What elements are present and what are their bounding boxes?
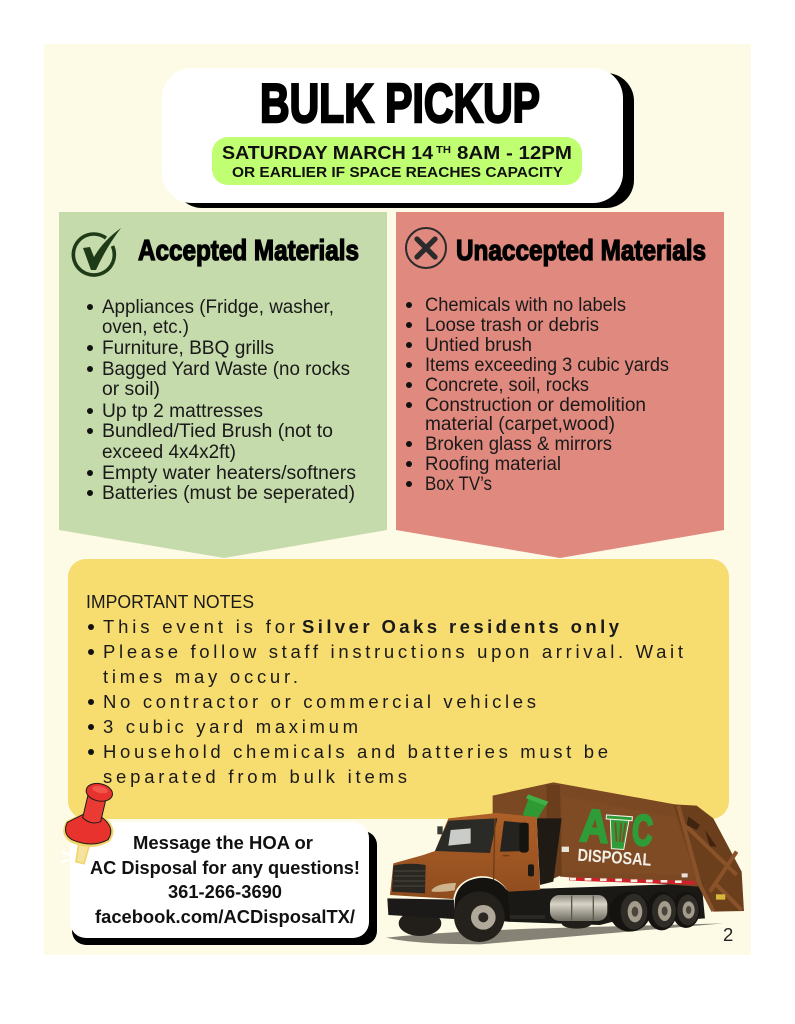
- unaccepted list: Roofing material: [425, 454, 561, 475]
- date pill: [212, 137, 582, 185]
- icon: x mark: [406, 228, 446, 268]
- title: BULK PICKUP: [260, 72, 540, 134]
- unaccepted list: Loose trash or debris: [425, 315, 599, 336]
- contact card: Message the HOA or: [133, 833, 313, 853]
- unaccepted list: Untied brush: [425, 335, 532, 356]
- unaccepted list: Concrete, soil, rocks: [425, 375, 589, 396]
- notes list: This event is for: [103, 616, 295, 637]
- accepted list: Bundled/Tied Brush (not to: [102, 421, 333, 442]
- accepted list: exceed 4x4x2ft): [102, 442, 236, 463]
- contact card: 361-266-3690: [168, 882, 282, 902]
- unaccepted list: Box TV’s: [425, 474, 492, 495]
- panel: important notes: [68, 559, 729, 819]
- accepted list: Up tp 2 mattresses: [102, 401, 263, 422]
- notes list: Household chemicals and batteries must be: [103, 741, 608, 762]
- accepted list: Bagged Yard Waste (no rocks: [102, 359, 350, 380]
- notes list: 3 cubic yard maximum: [103, 716, 358, 737]
- accepted list: or soil): [102, 379, 160, 400]
- heading: unaccepted: Unaccepted Materials: [456, 235, 706, 267]
- notes heading: IMPORTANT NOTES: [86, 591, 254, 612]
- notes list: Silver Oaks residents only: [302, 616, 620, 637]
- unaccepted list: material (carpet,wood): [425, 414, 615, 435]
- date pill: SATURDAY MARCH 14: [222, 142, 434, 163]
- page background: [44, 44, 751, 955]
- wheels: [454, 891, 700, 942]
- accepted list: [87, 297, 356, 504]
- truck logo: DISPOSAL: [577, 845, 652, 870]
- unaccepted list: [406, 295, 669, 495]
- accepted list: Appliances (Fridge, washer,: [102, 297, 334, 318]
- notes list: No contractor or commercial vehicles: [103, 691, 536, 712]
- unaccepted list: Broken glass & mirrors: [425, 434, 612, 455]
- date pill: 8AM - 12PM: [457, 142, 572, 163]
- heading: accepted: Accepted Materials: [138, 235, 359, 267]
- notes list: Please follow staff instructions upon arrival. Wait: [103, 641, 683, 662]
- accepted list: Batteries (must be seperated): [102, 483, 355, 504]
- green bin: [523, 794, 548, 820]
- panel: accepted materials: [59, 212, 387, 558]
- title card: [162, 68, 634, 208]
- unaccepted list: Items exceeding 3 cubic yards: [425, 355, 669, 376]
- panel: unaccepted materials: [396, 212, 724, 558]
- notes list: [88, 616, 683, 787]
- contact card: facebook.com/ACDisposalTX/: [95, 907, 355, 927]
- accepted list: Furniture, BBQ grills: [102, 338, 274, 359]
- notes list: separated from bulk items: [103, 766, 407, 787]
- unaccepted list: Construction or demolition: [425, 395, 646, 416]
- contact card: [70, 822, 377, 945]
- icon: check mark: [73, 228, 121, 275]
- truck logo: A: [579, 799, 611, 853]
- truck logo: [577, 799, 656, 870]
- date pill: TH: [436, 144, 451, 156]
- page number: 2: [723, 924, 733, 945]
- contact card: AC Disposal for any questions!: [90, 858, 360, 878]
- notes list: times may occur.: [103, 666, 298, 687]
- accepted list: Empty water heaters/softners: [102, 463, 356, 484]
- truck logo: C: [630, 806, 654, 856]
- date pill: OR EARLIER IF SPACE REACHES CAPACITY: [232, 165, 563, 181]
- unaccepted list: Chemicals with no labels: [425, 295, 626, 316]
- icon: red push pin: [62, 781, 114, 864]
- garbage truck: [386, 782, 744, 944]
- accepted list: oven, etc.): [102, 317, 189, 338]
